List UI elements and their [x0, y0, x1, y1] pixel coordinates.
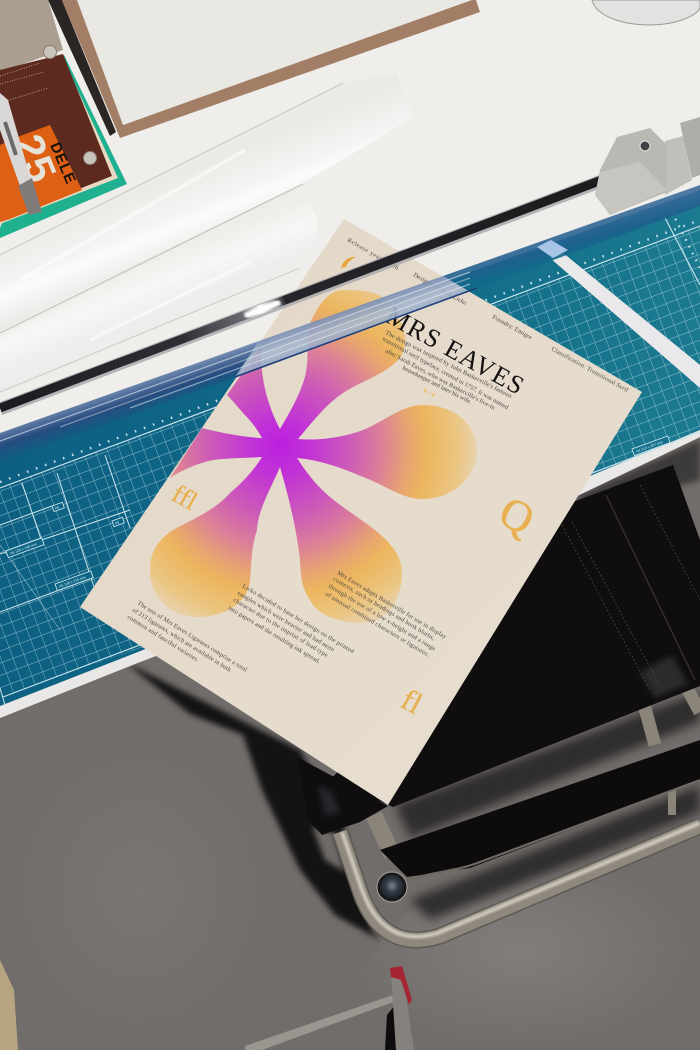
table edge strip	[0, 428, 700, 718]
mat size labels: A6 105 x 148 mm	[10, 542, 37, 556]
cream layer	[0, 60, 118, 224]
band streaks	[0, 272, 477, 441]
intro text: housekeeper and later his wife.	[401, 365, 473, 406]
intro text: transitional serif typeface, created in 1757. It was named	[381, 336, 510, 412]
metal knife	[0, 93, 42, 215]
card numerals: 25	[5, 128, 66, 189]
refracted petal fragment	[341, 257, 356, 268]
paragraph: ligatures: common and fanciful varieties.	[126, 614, 200, 664]
intro text: The design was inspired by John Baskerville's famous	[384, 330, 513, 400]
flower gradient shape	[150, 290, 477, 623]
glyph fl: fl	[396, 683, 427, 721]
band left section	[0, 341, 259, 463]
meta: designer: Designer: Zuzana Licko	[412, 272, 468, 307]
mat size labels: A5 148 x 210 mm	[59, 575, 86, 589]
frame interior	[77, 0, 472, 125]
strap edge	[398, 780, 700, 884]
connector block	[665, 136, 692, 195]
white paper strip	[550, 252, 700, 388]
board holes	[44, 46, 96, 164]
paragraph: Mrs Eaves adapts: Mrs Eaves adapts Baskerville for use in display	[336, 570, 448, 641]
paragraph: Licko decided: Licko decided to base her design on the printed	[241, 583, 356, 656]
paragraph: Licko decided: samples which were heavier and had more	[236, 590, 336, 654]
cutter head	[595, 117, 700, 215]
stool bracket	[385, 966, 414, 1050]
meta: release year: Release year: 1996	[346, 237, 400, 272]
upper roll	[0, 73, 413, 330]
object at bottom left	[0, 960, 18, 1050]
chair	[297, 465, 700, 940]
mat size labels: A5	[114, 520, 120, 525]
cutting board stack	[0, 0, 127, 238]
screw	[640, 141, 650, 151]
poster	[80, 219, 642, 805]
paragraph: Mrs Eaves adapts: of unusual combined characters or ligatures.	[324, 591, 431, 659]
glyph ffl: ffl	[167, 479, 202, 516]
mat grid	[0, 227, 700, 696]
card word: DELE	[46, 140, 79, 187]
lower roll	[0, 185, 320, 395]
glyph Q: Q	[491, 487, 543, 545]
paragraph: Licko decided: character due to the imprint of lead type	[232, 597, 329, 659]
main block	[595, 128, 667, 215]
mat size labels: A6	[54, 505, 60, 510]
paragraph: ligatures: of 213 ligatures, which are available in both	[131, 607, 233, 674]
lower leather strap	[380, 740, 700, 877]
mat ruler border	[0, 212, 700, 697]
chair tubular frame	[340, 823, 700, 940]
orange card	[0, 125, 82, 222]
concrete sample	[0, 0, 63, 72]
picture frame	[48, 0, 480, 138]
leather side flap	[297, 757, 388, 835]
band right section	[443, 185, 700, 291]
rail chrome	[0, 179, 607, 409]
chair back tubes	[374, 690, 700, 855]
brown board	[0, 54, 112, 220]
steel ball fitting	[377, 872, 407, 902]
seat sheen	[640, 655, 688, 698]
transparent ruler band	[0, 185, 700, 463]
paragraph: Mrs Eaves adapts: contexts, such as headings and book blurbs,	[332, 576, 436, 642]
band middle section over poster	[235, 276, 469, 377]
stool on the floor	[245, 966, 414, 1050]
rear block	[680, 117, 700, 178]
white table	[0, 0, 700, 718]
ruler tab	[537, 240, 568, 258]
poster and seat cast shadow	[125, 662, 380, 940]
title: MRS EAVES	[381, 301, 529, 400]
lamp base at top right	[592, 0, 700, 25]
meta: foundry: Foundry: Emigre	[491, 314, 533, 341]
paragraph: ligatures: The sets of Mrs Eaves Ligatures comprise a total	[136, 600, 248, 674]
perforation dots	[0, 63, 48, 102]
mat format lines	[0, 455, 130, 705]
rail highlight	[245, 302, 280, 316]
paragraph: Licko decided: into papers and the resulting ink spread.	[227, 605, 322, 666]
roll highlights	[0, 83, 343, 392]
paragraph: Mrs Eaves adapts: through the use of a low x-height and a range	[327, 583, 437, 653]
mat size labels: A4 210 x 297 mm	[636, 440, 663, 454]
ornament: +-+	[420, 385, 438, 402]
cutting mat	[0, 190, 700, 706]
stool rod	[245, 995, 393, 1050]
meta: classification: Classification: Transitional Serif	[550, 346, 630, 394]
mat size labels	[6, 436, 670, 591]
cutter rail	[0, 178, 607, 409]
leather seat	[330, 465, 700, 807]
intro text: after Sarah Eaves, who was Baskerville's live-in	[384, 348, 496, 412]
block shade	[595, 162, 667, 215]
seat stitching	[562, 485, 700, 690]
rail core	[0, 178, 607, 408]
paper rolls	[0, 73, 413, 395]
floor shadows	[125, 440, 700, 940]
green board	[0, 55, 127, 238]
poster sheet	[80, 219, 642, 805]
light gap in shadow	[312, 826, 345, 872]
